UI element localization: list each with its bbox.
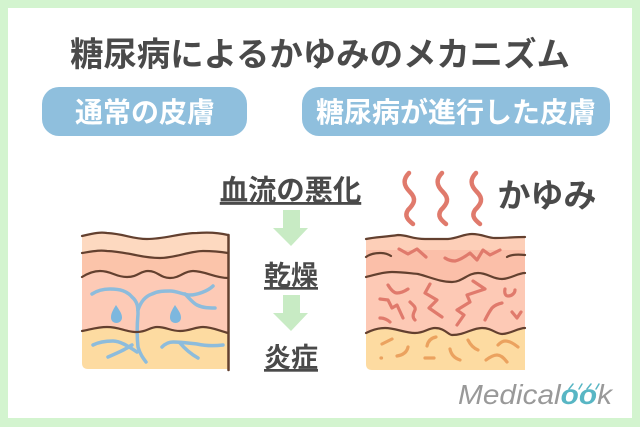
blood vessels	[92, 286, 223, 362]
text: inflammation: 炎症	[264, 343, 318, 373]
water drops	[111, 305, 181, 323]
arrow: down 1	[273, 210, 308, 246]
flow: cause to symptom	[220, 174, 361, 373]
arrow: down 2	[273, 295, 308, 331]
itch squiggles	[405, 173, 481, 224]
label pill: normal skin: 通常の皮膚	[75, 97, 215, 128]
text: poor blood flow: 血流の悪化	[220, 174, 361, 206]
logo: Medicalook: Medicalook	[458, 379, 614, 410]
label pill: diabetic skin: 糖尿病が進行した皮膚	[316, 96, 596, 128]
illustration: normal skin cross-section	[82, 233, 228, 370]
label pill: normal skin	[42, 87, 247, 136]
label pill: diabetic skin	[302, 87, 610, 136]
text: itch: かゆみ	[498, 177, 596, 214]
text: dryness: 乾燥	[264, 261, 318, 291]
title: 糖尿病によるかゆみのメカニズム	[70, 36, 570, 74]
illustration: diabetic skin cross-section	[366, 234, 525, 370]
damaged vessels	[380, 249, 521, 325]
